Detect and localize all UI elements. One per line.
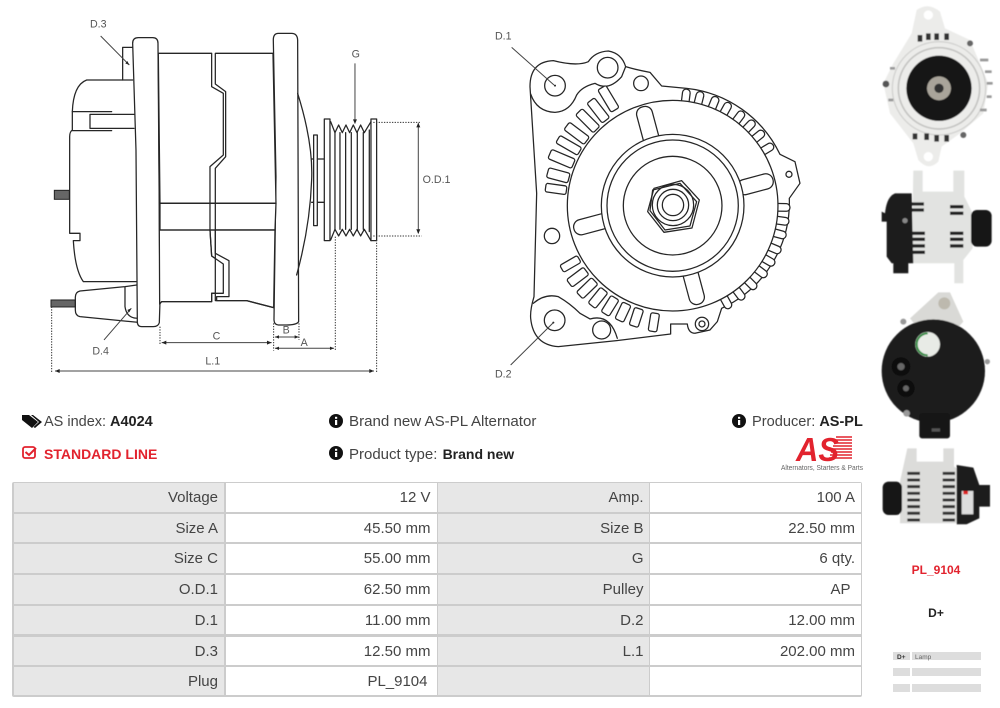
row: O.D.1 and pulley bbox=[14, 575, 861, 604]
mounting lobes bbox=[531, 57, 792, 339]
dimension labels: L.1 bbox=[205, 356, 220, 368]
connector pin table: D+ bbox=[897, 654, 906, 661]
row: size A and B: 45.50 mm bbox=[364, 520, 430, 537]
plug code: PL_9104 bbox=[912, 563, 960, 577]
connector pin table: Lamp bbox=[915, 654, 932, 661]
row: O.D.1 and pulley: Pulley bbox=[603, 581, 644, 598]
dimension labels: O.D.1 bbox=[423, 174, 451, 186]
cooling slots left bbox=[545, 85, 660, 332]
photo: alternator side bbox=[882, 171, 992, 283]
AS index bbox=[44, 414, 153, 430]
leader lines and labels: D.2 bbox=[495, 368, 512, 380]
row: size A and B: Size A bbox=[175, 520, 218, 537]
row: voltage and amperage: 12 V bbox=[400, 489, 430, 506]
row: D.1 and D.2 bbox=[14, 606, 861, 634]
row: plug: PL_9104 bbox=[367, 673, 428, 690]
product description: Brand new AS-PL Alternator bbox=[349, 413, 536, 430]
row: size A and B: Size B bbox=[600, 520, 644, 537]
row: size A and B: 22.50 mm bbox=[788, 520, 855, 537]
row: voltage and amperage bbox=[14, 483, 861, 512]
dimension labels: D.3 bbox=[90, 18, 107, 30]
AS index: AS index: bbox=[44, 414, 106, 430]
AS logo bbox=[781, 431, 863, 472]
cooling notches right bbox=[681, 89, 790, 310]
standard line badge: STANDARD LINE bbox=[44, 446, 157, 462]
icon: info product type bbox=[329, 446, 343, 460]
row: size C and G: 55.00 mm bbox=[364, 550, 430, 567]
row: D.3 and L.1: 12.50 mm bbox=[364, 642, 430, 660]
row: size A and B bbox=[14, 514, 861, 542]
row: D.3 and L.1: D.3 bbox=[195, 642, 218, 660]
row: O.D.1 and pulley: 62.50 mm bbox=[364, 581, 430, 598]
icon: info brand bbox=[329, 414, 343, 428]
icon: tags bbox=[22, 415, 42, 428]
AS logo: Alternators, Starters & Parts bbox=[781, 463, 863, 472]
row: D.3 and L.1: L.1 bbox=[623, 642, 644, 660]
row: D.3 and L.1 bbox=[14, 637, 861, 665]
dimension labels: D.4 bbox=[92, 345, 109, 357]
product type: Product type: Brand new bbox=[349, 446, 514, 463]
leader lines and labels bbox=[495, 30, 554, 380]
dimension labels: B bbox=[283, 325, 290, 337]
central rotor bbox=[567, 100, 778, 311]
row: voltage and amperage: 100 A bbox=[817, 489, 855, 506]
pulley bbox=[297, 93, 377, 275]
row: plug: Plug bbox=[188, 673, 218, 690]
dimension labels: C bbox=[213, 330, 221, 342]
dimension lines bbox=[52, 36, 422, 373]
row: D.3 and L.1: 202.00 mm bbox=[780, 642, 855, 660]
icon: info producer bbox=[732, 414, 746, 428]
photo: alternator front bbox=[883, 6, 993, 166]
stator body bbox=[158, 53, 276, 308]
row: D.1 and D.2: D.1 bbox=[195, 612, 218, 629]
icon: red check box bbox=[23, 447, 36, 458]
connector pin table bbox=[893, 652, 981, 692]
text: A4024 bbox=[110, 414, 153, 430]
row: plug bbox=[14, 667, 861, 695]
dimension labels: G bbox=[352, 49, 360, 61]
dimension labels: A bbox=[301, 337, 309, 349]
row: voltage and amperage: Amp. bbox=[608, 489, 644, 506]
front and rear flanges bbox=[133, 33, 299, 327]
row: size C and G bbox=[14, 544, 861, 573]
row: O.D.1 and pulley: O.D.1 bbox=[179, 581, 218, 598]
producer: Producer: AS-PL bbox=[752, 414, 863, 430]
row: size C and G: G bbox=[632, 550, 644, 567]
AS logo: AS bbox=[795, 431, 839, 468]
photo: alternator side rear bbox=[883, 448, 990, 524]
connector label: D+ bbox=[928, 606, 944, 620]
dimension labels bbox=[90, 18, 451, 368]
rear cover bbox=[51, 47, 137, 322]
front view technical drawing bbox=[495, 30, 800, 380]
row: voltage and amperage: Voltage bbox=[168, 489, 218, 506]
specification table bbox=[12, 482, 862, 697]
leader lines and labels: D.1 bbox=[495, 30, 512, 42]
photo: alternator rear bbox=[882, 292, 990, 438]
row: D.1 and D.2: D.2 bbox=[620, 612, 644, 629]
side view technical drawing bbox=[51, 18, 451, 373]
row: D.1 and D.2: 12.00 mm bbox=[788, 612, 855, 629]
row: size C and G: Size C bbox=[174, 550, 218, 567]
row: D.1 and D.2: 11.00 mm bbox=[365, 612, 430, 629]
row: O.D.1 and pulley: AP bbox=[830, 581, 850, 598]
row: size C and G: 6 qty. bbox=[819, 550, 855, 567]
housing outline bbox=[530, 51, 800, 347]
